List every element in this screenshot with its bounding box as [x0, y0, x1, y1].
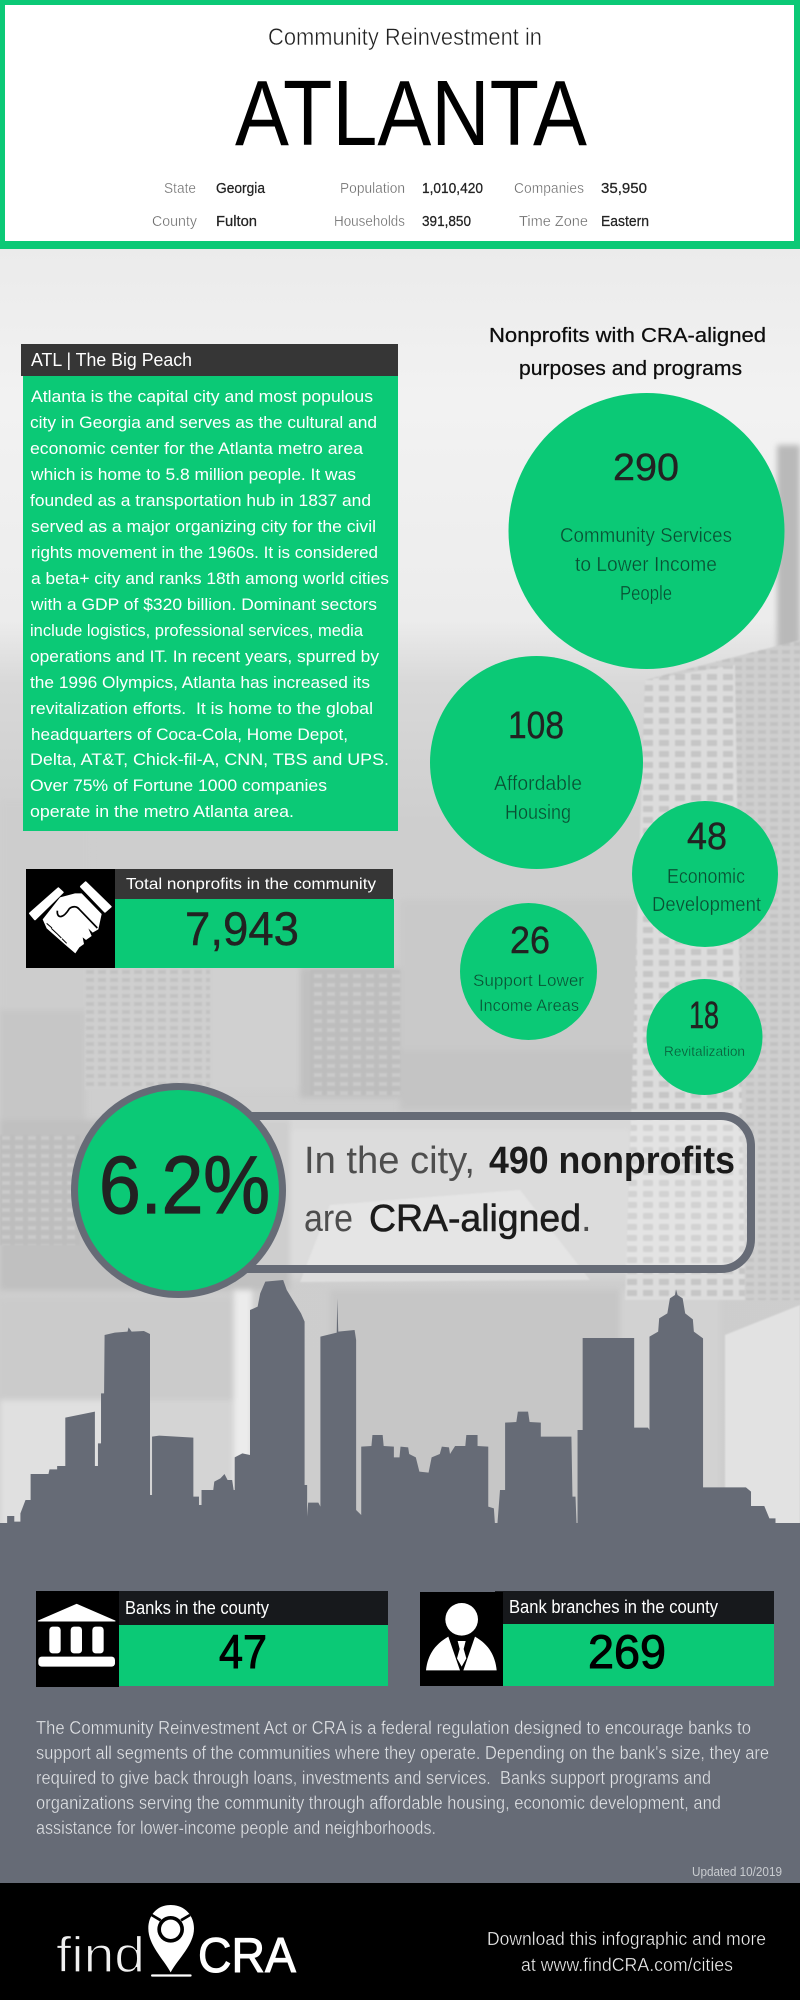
description text: Atlanta is the capital city and most populous: [31, 388, 373, 406]
bubble: economic development: Development: [652, 894, 761, 916]
callout box: [200, 1116, 751, 1269]
heading: nonprofits with CRA-aligned purposes: purposes and programs: [519, 358, 742, 380]
bubble: affordable housing: [430, 656, 643, 869]
bubble: community services: 290: [613, 447, 679, 489]
panel: ATL description: [21, 344, 398, 831]
callout text: .: [581, 1198, 592, 1240]
bubble: affordable housing: 108: [508, 705, 564, 747]
bubble: community services: People: [620, 583, 672, 605]
city facts table: 391,850: [422, 213, 471, 230]
lower gray panel: [0, 1523, 800, 1883]
bubble: community services: to Lower Income: [575, 554, 717, 576]
description text: which is home to 5.8 million people. It was: [30, 466, 356, 484]
percentage value: 6.2%: [99, 1140, 270, 1231]
callout: 6.2% CRA-aligned: [74, 1086, 751, 1294]
panel heading: ATL | The Big Peach: [31, 350, 192, 370]
stat label: Total nonprofits in the community: [126, 876, 376, 893]
description text: economic center for the Atlanta metro area: [30, 440, 364, 458]
download call to action: [487, 1929, 766, 1975]
stat: bank branches: Bank branches in the county: [509, 1597, 718, 1617]
description text: served as a major organizing city for the civil: [31, 518, 376, 536]
CRA explanation text: organizations serving the community through affordable housing, economic development, and: [36, 1793, 721, 1813]
updated date: Updated 10/2019: [692, 1864, 782, 1879]
description text: Delta, AT&T, Chick-fil-A, CNN, TBS and UPS.: [30, 751, 389, 769]
bubble: community services: [508, 393, 784, 669]
callout text: are: [304, 1198, 353, 1240]
bubble: affordable housing: Housing: [505, 802, 571, 824]
heading: nonprofits with CRA-aligned purposes: [489, 325, 766, 380]
logo: findCRA: find: [56, 1927, 145, 1983]
CRA explanation text: The Community Reinvestment Act or CRA is a federal regulation designed to encourage banks to: [36, 1718, 751, 1738]
bubble: affordable housing: Affordable: [494, 773, 582, 795]
description text: rights movement in the 1960s. It is considered: [31, 544, 378, 562]
description text: operate in the metro Atlanta area.: [30, 803, 294, 821]
download call to action: Download this infographic and more: [487, 1929, 766, 1949]
city facts table: 35,950: [601, 180, 647, 197]
description text: the 1996 Olympics, Atlanta has increased its: [30, 674, 370, 692]
bubble: community services: Community Services: [560, 525, 732, 547]
bubble: economic development: [632, 801, 778, 947]
city facts table: Population: [340, 180, 405, 197]
background: grayscale city photo: [0, 249, 800, 1539]
CRA explanation text: required to give back through loans, investments and services. Banks support programs and: [36, 1768, 711, 1788]
callout text: In the city,: [304, 1140, 475, 1182]
description text: city in Georgia and serves as the cultural and: [30, 414, 377, 432]
bubble: economic development: Economic: [667, 866, 745, 888]
city facts table: Time Zone: [519, 213, 588, 230]
icon: bank: [38, 1604, 115, 1667]
description text: [30, 388, 389, 821]
stat value: 7,943: [185, 902, 299, 955]
description text: headquarters of Coca-Cola, Home Depot,: [31, 726, 348, 744]
bubble: support lower income areas: [460, 903, 597, 1040]
stat: bank branches: [420, 1591, 774, 1686]
city facts table: 1,010,420: [422, 180, 483, 197]
callout text: [304, 1140, 735, 1240]
header panel: [0, 0, 800, 249]
city facts table: Companies: [514, 180, 584, 197]
skyline silhouette: [0, 1280, 800, 1543]
stat: banks: [36, 1591, 388, 1687]
header subtitle: Community Reinvestment in: [268, 24, 542, 51]
description text: founded as a transportation hub in 1837 and: [30, 492, 371, 510]
callout text: CRA-aligned: [369, 1198, 581, 1240]
icon: map pin: [148, 1905, 194, 1977]
city facts table: County: [152, 213, 197, 230]
stat: banks: Banks in the county: [125, 1598, 269, 1618]
logo: findCRA: CRA: [198, 1929, 296, 1983]
footer: [0, 1883, 800, 2000]
bubble: economic development: 48: [687, 816, 727, 858]
description text: include logistics, professional services, media: [30, 622, 364, 640]
city title: ATLANTA: [235, 61, 587, 165]
stat: total nonprofits: [26, 869, 394, 968]
description text: with a GDP of $320 billion. Dominant sectors: [30, 596, 377, 614]
stat: banks: 47: [219, 1625, 267, 1678]
download call to action: at www.findCRA.com/cities: [521, 1955, 733, 1975]
bubble: support lower income areas: 26: [510, 920, 550, 962]
description text: Over 75% of Fortune 1000 companies: [30, 777, 327, 795]
city facts table: Eastern: [601, 213, 649, 230]
bubble: revitalization: Revitalization: [664, 1043, 745, 1059]
CRA explanation text: [36, 1718, 769, 1838]
callout text: 490 nonprofits: [489, 1140, 735, 1182]
description text: operations and IT. In recent years, spurred by: [30, 648, 380, 666]
description text: revitalization efforts. It is home to the global: [30, 700, 373, 718]
bubble: revitalization: [646, 979, 762, 1095]
city facts table: Georgia: [216, 180, 266, 197]
heading: nonprofits with CRA-aligned purposes: Nonprofits with CRA-aligned: [489, 325, 766, 347]
bubble: support lower income areas: Support Lower: [473, 971, 584, 990]
CRA explanation text: assistance for lower-income people and neighborhoods.: [36, 1818, 436, 1838]
description text: a beta+ city and ranks 18th among world cities: [31, 570, 389, 588]
logo: findCRA: [56, 1905, 296, 1983]
icon: person in suit: [426, 1603, 497, 1670]
percentage circle: [74, 1086, 282, 1294]
city facts table: Fulton: [216, 213, 257, 230]
city facts table: [152, 180, 649, 230]
city facts table: Households: [334, 213, 405, 230]
bubble: revitalization: 18: [689, 995, 719, 1037]
bubble: support lower income areas: Income Areas: [479, 996, 579, 1015]
city facts table: State: [164, 180, 196, 197]
icon: handshake: [30, 882, 111, 953]
stat: bank branches: 269: [588, 1625, 666, 1678]
